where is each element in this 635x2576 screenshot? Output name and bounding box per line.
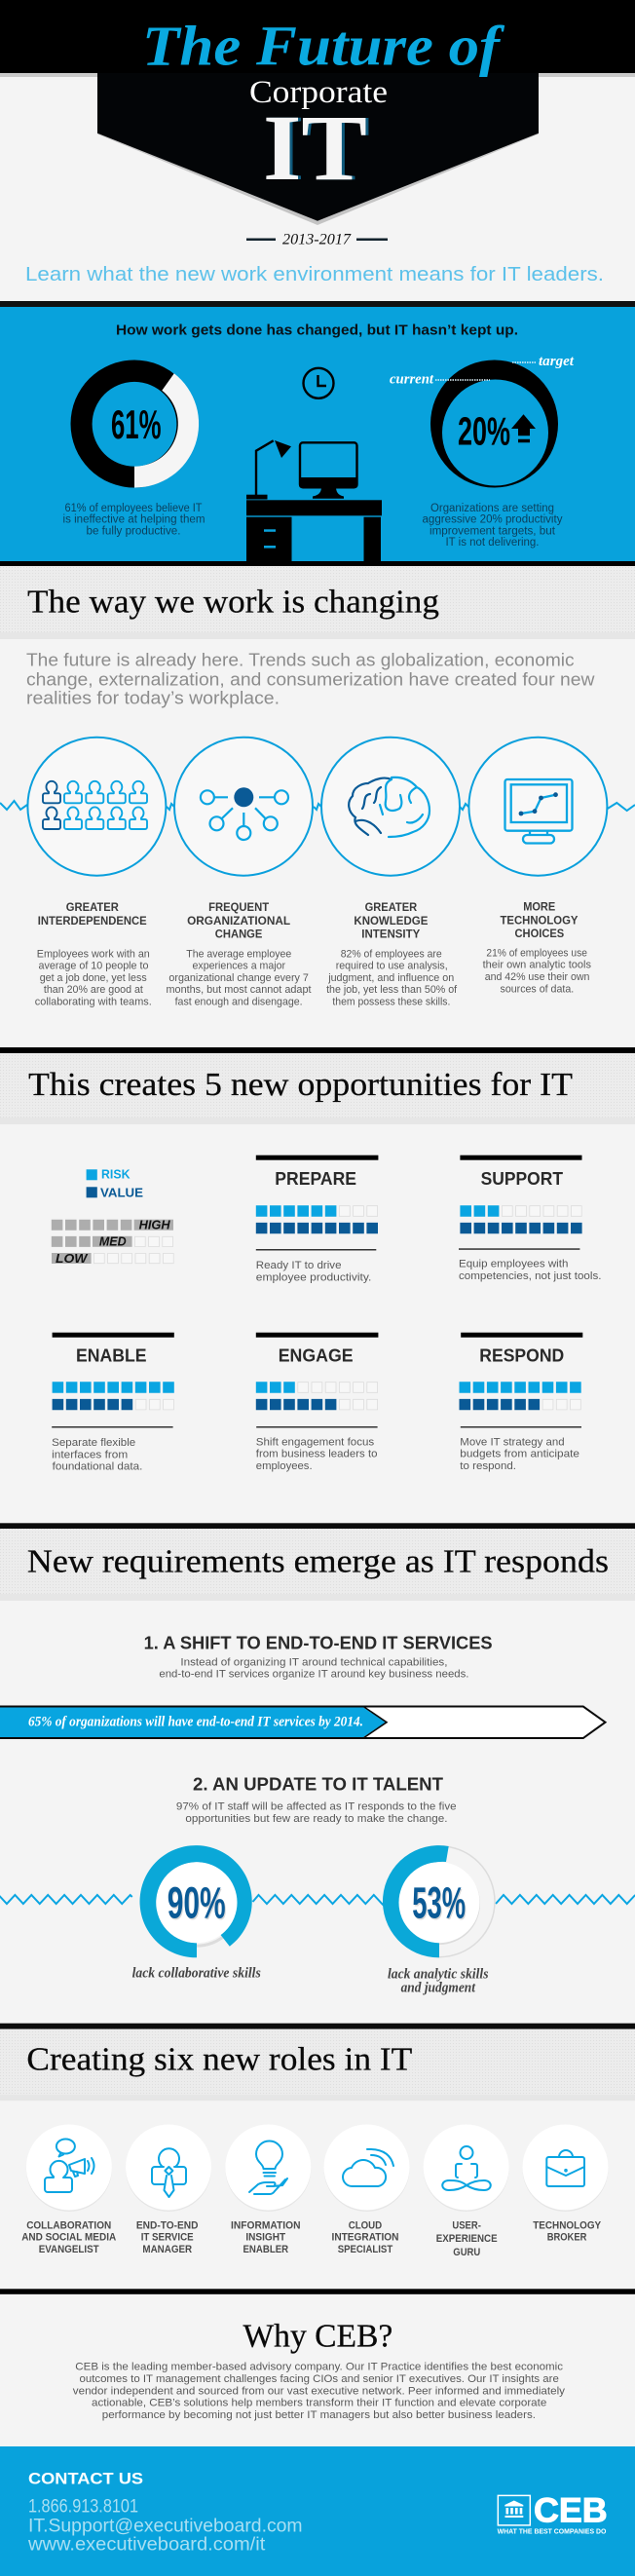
label: EXPERIENCE (436, 2233, 498, 2245)
label (533, 2219, 602, 2244)
card: enable: foundational data. (53, 1461, 142, 1473)
panel: interdependence circle (27, 738, 166, 876)
title IT: IT (263, 95, 367, 200)
ring chart: current versus target (430, 360, 558, 487)
donut chart: 61 percent: 61% (111, 401, 162, 447)
text block: frequent organizational change: ORGANIZATIONAL (187, 914, 290, 928)
right caption (423, 503, 563, 549)
left caption: is ineffective at helping them (62, 514, 205, 526)
icon: cloud with signal (343, 2149, 393, 2186)
subtitle: Learn what the new work environment means for IT leaders. (25, 264, 604, 285)
requirement two description: opportunities but few are ready to make the change. (185, 1813, 448, 1825)
ring chart: current versus target: 20% (458, 409, 510, 454)
label: CLOUD (349, 2219, 382, 2231)
label: INFORMATION (231, 2219, 301, 2231)
icon: team of people (43, 781, 147, 829)
card: enable (52, 1333, 174, 1473)
text block: greater interdependence: than 20% are good at (44, 984, 143, 996)
donut chart: 90 percent: 90% (168, 1879, 227, 1929)
card: prepare (256, 1155, 378, 1283)
text block: greater knowledge intensity: required to use analysis, (336, 961, 448, 972)
icon: clock (304, 368, 333, 398)
legend: risk and value (52, 1167, 174, 1266)
legend: risk and value: RISK (101, 1167, 131, 1181)
text block: more technology choices: 21% of employees use (486, 948, 587, 960)
label: lack analytic skills (388, 1966, 489, 1996)
card: engage: Shift engagement focus (256, 1436, 375, 1448)
panel: knowledge intensity circle (321, 738, 460, 876)
role: cloud integration specialist (323, 2124, 409, 2255)
progress arrow: 65 percent: 65% of organizations will have end-to-end IT services by 2014. (28, 1714, 363, 1729)
right caption: aggressive 20% productivity (423, 514, 563, 526)
text block: more technology choices: TECHNOLOGY (501, 913, 579, 927)
logo: CEB: CEB (534, 2491, 608, 2529)
text block: frequent organizational change (166, 900, 312, 1007)
label (331, 2219, 399, 2255)
text block: greater knowledge intensity: KNOWLEDGE (354, 914, 428, 928)
intro paragraph (26, 650, 595, 708)
label: MANAGER (142, 2244, 192, 2255)
requirement two heading: 2. AN UPDATE TO IT TALENT (193, 1775, 443, 1795)
left caption: be fully productive. (86, 525, 181, 537)
contact details (27, 2495, 303, 2556)
text block: frequent organizational change: experiences a major (193, 961, 285, 972)
card: enable: ENABLE (76, 1346, 146, 1366)
requirement one description: end-to-end IT services organize IT around key business needs. (159, 1669, 469, 1681)
card: support (459, 1155, 602, 1282)
shield shape (97, 73, 539, 225)
label: END-TO-END (136, 2219, 199, 2231)
target label (512, 354, 575, 369)
card: prepare: PREPARE (275, 1169, 356, 1189)
current label: current (390, 371, 434, 387)
section heading: new requirements: New requirements emerge as IT responds (27, 1543, 609, 1579)
text block: frequent organizational change: The average employee (186, 948, 291, 960)
icon: light bulb on hand (249, 2141, 287, 2194)
donut chart: 90 percent (140, 1845, 252, 1957)
card: engage: employees. (256, 1460, 313, 1472)
text block: greater knowledge intensity: 82% of employees are (341, 948, 442, 960)
text block: greater knowledge intensity: them possess these skills. (332, 996, 450, 1007)
label: INSIGHT (245, 2232, 285, 2244)
intro paragraph: realities for today’s workplace. (26, 689, 280, 708)
left caption: 61% of employees believe IT (64, 503, 203, 514)
footer: contact (0, 2446, 635, 2576)
label: IT SERVICE (141, 2232, 194, 2244)
role: user-experience guru (424, 2124, 509, 2258)
requirement one description (159, 1656, 469, 1681)
right caption: improvement targets, but (430, 525, 556, 537)
intro paragraph: The future is already here. Trends such as globalization, economic (26, 650, 575, 669)
left caption (62, 503, 205, 537)
section heading: five opportunities: This creates 5 new opportunities for IT (28, 1067, 573, 1103)
label: EVANGELIST (39, 2244, 99, 2255)
title IT: IT (266, 95, 370, 200)
text block: greater interdependence: collaborating with teams. (35, 996, 152, 1007)
panel: organizational change circle (174, 738, 313, 876)
icon: brain (349, 777, 430, 837)
right caption: IT is not delivering. (446, 537, 540, 549)
description: vendor independent and sourced from our vast executive network. Peer informed and immediately (73, 2385, 566, 2397)
label: lack collaborative skills: lack collaborative skills (132, 1965, 261, 1981)
role: end-to-end service manager (126, 2124, 211, 2255)
section heading: six new roles (0, 2024, 635, 2101)
title line one: The Future of (142, 15, 505, 78)
icon: person with megaphone (45, 2140, 93, 2192)
text block: greater knowledge intensity: judgment, and influence on (327, 972, 454, 984)
label: ENABLER (243, 2244, 288, 2255)
intro paragraph: change, externalization, and consumerization have created four new (26, 669, 595, 689)
description: performance by becoming not just better IT managers but also better business leaders. (102, 2409, 536, 2421)
text block: greater knowledge intensity (326, 900, 458, 1007)
icon: briefcase (546, 2150, 584, 2186)
text block: frequent organizational change: organizational change every 7 (168, 972, 309, 984)
description: actionable, CEB’s solutions help members transform their IT function and elevate corporate (92, 2398, 546, 2409)
text block: greater interdependence: GREATER (66, 900, 119, 914)
card: support: Equip employees with (459, 1259, 568, 1270)
card: respond (460, 1333, 582, 1472)
panel: blue intro (0, 301, 635, 566)
text block: greater interdependence: average of 10 people to (39, 961, 148, 972)
role: technology broker (522, 2124, 608, 2244)
card: respond: to respond. (460, 1460, 516, 1472)
card: support: SUPPORT (481, 1169, 563, 1189)
section heading: the way we work (0, 566, 635, 639)
contact heading: CONTACT US (28, 2469, 143, 2487)
text block: greater interdependence: get a job done, yet less (40, 972, 147, 984)
section heading: the way we work: The way we work is changing (27, 584, 439, 620)
text block: more technology choices: and 42% use their own (485, 971, 589, 983)
heading: Why CEB? (243, 2318, 392, 2354)
date range: 2013-2017 (282, 232, 352, 248)
text block: frequent organizational change: FREQUENT (208, 900, 270, 914)
contact details: IT.Support@executiveboard.com (28, 2515, 303, 2536)
label: GURU (453, 2247, 480, 2258)
current label (390, 371, 490, 387)
logo: CEB (498, 2491, 608, 2536)
text block: greater interdependence: Employees work with an (37, 948, 150, 960)
icon: person with tie (152, 2148, 186, 2197)
text block: greater interdependence (35, 900, 152, 1007)
label (136, 2219, 199, 2255)
label (21, 2219, 116, 2255)
requirement one description: Instead of organizing IT around technical capabilities, (180, 1656, 448, 1668)
text block: more technology choices: CHOICES (514, 927, 564, 940)
label: BROKER (547, 2232, 586, 2244)
text block: greater interdependence: INTERDEPENDENCE (38, 914, 147, 928)
label: lack analytic skills: and judgment (401, 1981, 476, 1996)
text block: more technology choices: MORE (523, 899, 555, 913)
text block: frequent organizational change: months, but most cannot adapt (166, 984, 312, 996)
text block: greater knowledge intensity: INTENSITY (361, 928, 420, 941)
card: engage (256, 1333, 378, 1472)
description: CEB is the leading member-based advisory company. Our IT Practice identifies the best economic (75, 2362, 564, 2373)
icon: up arrow (511, 414, 536, 442)
card: prepare: employee productivity. (256, 1271, 371, 1283)
target label: target (539, 354, 575, 369)
text block: more technology choices (483, 899, 591, 996)
requirement two description: 97% of IT staff will be affected as IT responds to the five (176, 1801, 457, 1813)
title line two: Corporate (249, 75, 388, 110)
section heading: five opportunities (0, 1047, 635, 1124)
icon: monitor with chart (504, 779, 573, 844)
label (436, 2219, 498, 2258)
section heading: six new roles: Creating six new roles in IT (26, 2041, 413, 2077)
donut chart: 61 percent (70, 360, 199, 488)
text block: frequent organizational change: CHANGE (215, 928, 262, 941)
card: support: competencies, not just tools. (459, 1270, 602, 1282)
scale: high: HIGH (139, 1218, 171, 1231)
label: SPECIALIST (338, 2244, 392, 2255)
text block: frequent organizational change: fast enough and disengage. (175, 996, 303, 1007)
description: outcomes to IT management challenges facing CIOs and senior IT executives. Our IT insights are (80, 2373, 559, 2385)
label: INTEGRATION (331, 2232, 399, 2244)
role: collaboration evangelist (21, 2124, 116, 2255)
label (231, 2219, 301, 2255)
section: why CEB (0, 2289, 635, 2421)
scale: low: LOW (56, 1252, 89, 1266)
card: prepare: Ready IT to drive (256, 1260, 341, 1271)
card: engage: ENGAGE (279, 1346, 354, 1366)
text block: greater knowledge intensity: the job, yet less than 50% of (326, 984, 458, 996)
card: respond: Move IT strategy and (460, 1436, 565, 1448)
card: enable: Separate flexible (52, 1437, 135, 1449)
donut chart: 90 percent: 90% (168, 1877, 226, 1927)
logo: CEB: WHAT THE BEST COMPANIES DO (498, 2527, 607, 2536)
donut chart: 53 percent: 53% (413, 1879, 467, 1929)
legend: risk and value: VALUE (100, 1186, 143, 1199)
donut chart: 53 percent (383, 1845, 495, 1957)
label: lack analytic skills: lack analytic skills (388, 1966, 489, 1982)
scale: med: MED (99, 1235, 127, 1249)
card: engage: from business leaders to (256, 1449, 378, 1460)
icon: desk with lamp and monitor (246, 440, 382, 561)
text block: greater knowledge intensity: GREATER (365, 900, 418, 914)
progress arrow: 65 percent (0, 1707, 606, 1738)
description (73, 2362, 566, 2421)
contact details: www.executiveboard.com/it (27, 2534, 266, 2556)
label: USER- (452, 2219, 481, 2231)
requirement one heading: 1. A SHIFT TO END-TO-END IT SERVICES (144, 1633, 493, 1652)
donut chart: 53 percent: 53% (412, 1877, 466, 1927)
card: respond: RESPOND (479, 1346, 564, 1366)
label: TECHNOLOGY (533, 2219, 602, 2231)
intro heading: How work gets done has changed, but IT hasn’t kept up. (116, 322, 518, 338)
text block: more technology choices: sources of data. (501, 984, 574, 996)
section heading: new requirements (0, 1523, 635, 1601)
icon: network (201, 787, 288, 840)
card: respond: budgets from anticipate (460, 1449, 579, 1460)
card: enable: interfaces from (52, 1449, 128, 1460)
zigzag connector (0, 801, 635, 811)
panel: technology choices circle (468, 738, 607, 876)
label: COLLABORATION (26, 2219, 111, 2231)
contact details: 1.866.913.8101 (28, 2495, 138, 2517)
label: AND SOCIAL MEDIA (21, 2232, 116, 2244)
icon: meditating person (442, 2146, 491, 2190)
right caption: Organizations are setting (430, 503, 554, 514)
header banner (0, 0, 635, 225)
role: information insight enabler (225, 2124, 311, 2255)
zigzag connector (0, 1895, 635, 1908)
text block: more technology choices: their own analytic tools (483, 960, 591, 971)
requirement two description (176, 1801, 457, 1825)
